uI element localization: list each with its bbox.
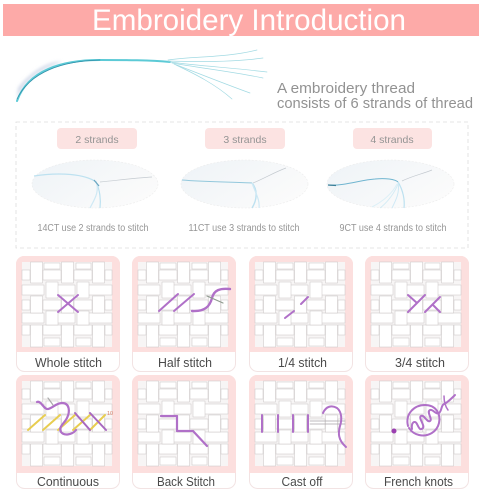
card: cast off xyxy=(249,375,353,489)
card: cast off: Cast off xyxy=(282,474,323,489)
stitch: cast off with thread xyxy=(262,406,346,447)
stitch: two quarter stitches xyxy=(285,297,308,318)
card: continuous: 10 xyxy=(107,411,113,417)
card: 1/4 stitch: 1/4 stitch xyxy=(278,355,327,370)
option: 2 strands: 14CT use 2 strands to stitch xyxy=(38,223,148,234)
card: 3/4 stitch xyxy=(365,256,469,372)
stitch: cross xyxy=(58,295,78,312)
panel: strand options xyxy=(16,122,468,248)
card: french knots: French knots xyxy=(384,474,453,489)
option: 4 strands xyxy=(327,128,454,234)
card: half stitch: Half stitch xyxy=(158,355,212,370)
option: 4 strands: 4 strands xyxy=(370,134,414,146)
card: back stitch xyxy=(132,375,236,489)
text: thread description xyxy=(277,80,473,112)
card: 1/4 stitch xyxy=(249,256,353,372)
option: 2 strands: 2 strands xyxy=(75,134,119,146)
text: thread description: A embroidery thread xyxy=(277,80,415,97)
illustration: thread splitting into six strands xyxy=(17,50,267,101)
stitch: french knot coil and dot xyxy=(392,395,455,435)
card: whole stitch xyxy=(16,256,120,372)
card: continuous xyxy=(16,375,120,489)
card: half stitch xyxy=(132,256,236,372)
option: 3 strands: 11CT use 3 strands to stitch xyxy=(188,223,300,234)
card: whole stitch: Whole stitch xyxy=(35,355,102,370)
card: 3/4 stitch: 3/4 stitch xyxy=(395,355,445,370)
stitch: three-quarter stitches xyxy=(408,295,440,312)
option: 4 strands: 9CT use 4 strands to stitch xyxy=(340,223,446,234)
stitch: back stitch path xyxy=(161,416,207,446)
stitch: half stitches with thread and needle xyxy=(159,289,230,311)
stitch: continuous row with yellow and purple thread xyxy=(28,398,106,434)
card: continuous: Continuous xyxy=(37,474,99,489)
title banner: Embroidery Introduction xyxy=(92,4,406,37)
card: back stitch: Back Stitch xyxy=(157,474,215,489)
text: thread description: consists of 6 strands of thread xyxy=(277,95,473,112)
option: 3 strands xyxy=(181,128,308,234)
card: french knots xyxy=(365,375,469,489)
title banner xyxy=(3,4,479,37)
option: 2 strands xyxy=(32,128,158,234)
option: 3 strands: 3 strands xyxy=(223,134,267,146)
